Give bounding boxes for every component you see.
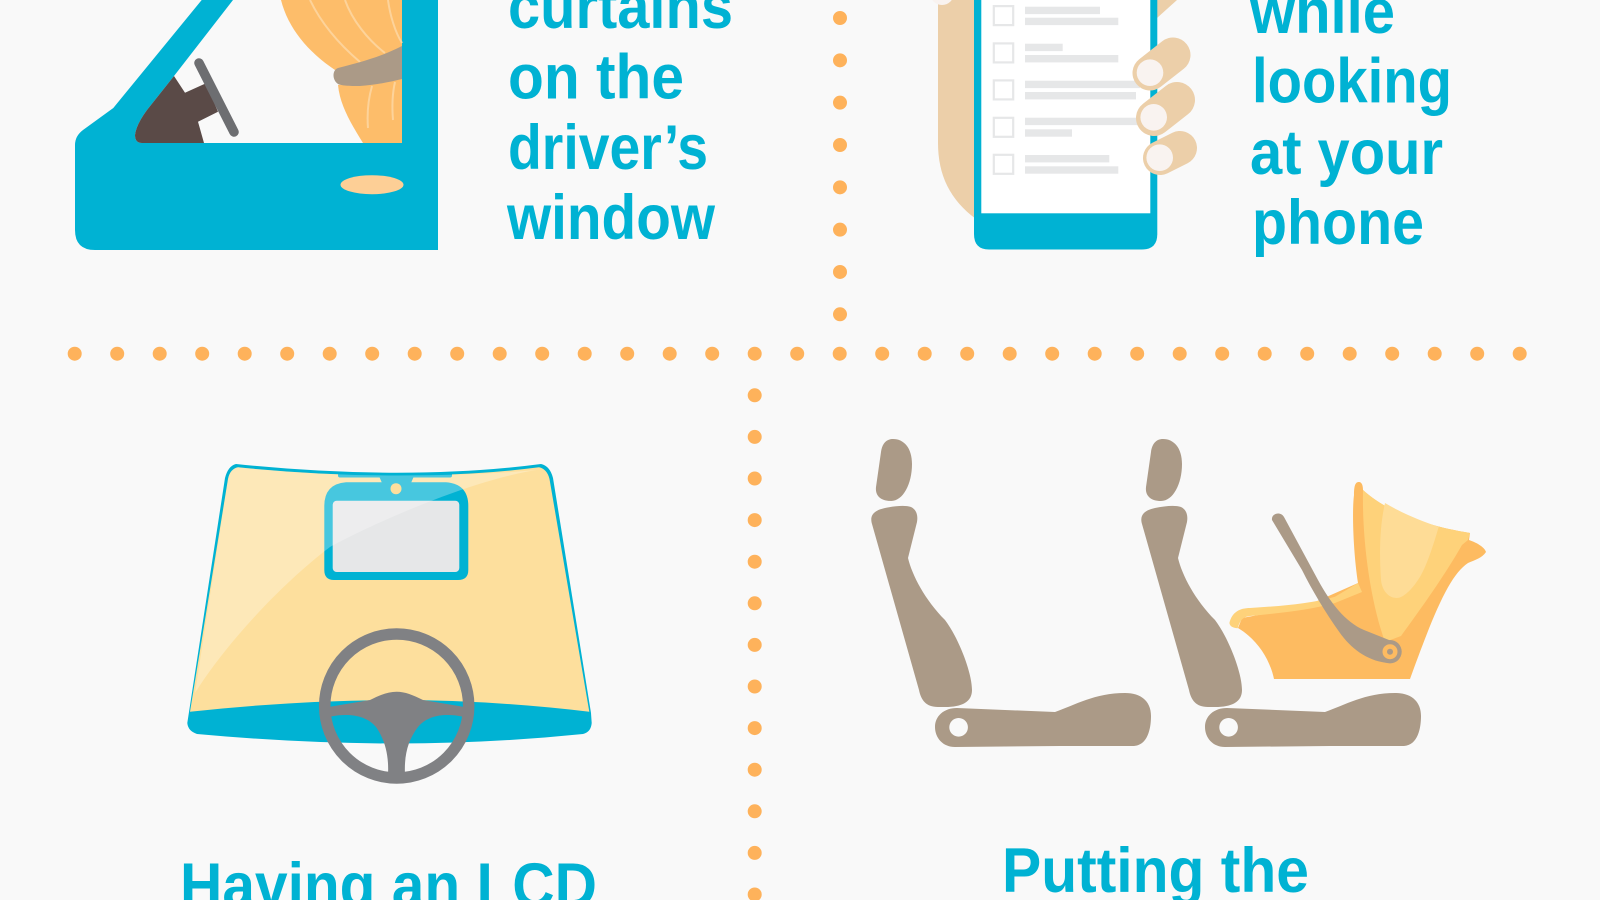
panel: putting the baby seat in the front xyxy=(871,439,1486,900)
steering wheel xyxy=(325,634,469,778)
panel: curtains on the driver's window xyxy=(75,0,733,253)
icon: car seat with baby carrier xyxy=(1141,439,1486,747)
panel: having an LCD on the windshield xyxy=(180,464,597,900)
baby carrier xyxy=(1229,482,1486,679)
icon: empty car seat xyxy=(871,439,1151,747)
LCD screen on mirror mount xyxy=(324,473,468,580)
text: while looking at your phone: phone xyxy=(1252,188,1424,258)
text: curtains on the driver's window xyxy=(506,0,733,253)
icon: windshield with LCD and steering wheel xyxy=(187,464,592,778)
car seat xyxy=(1141,439,1421,747)
text: while looking at your phone: looking xyxy=(1252,47,1452,117)
panel: walking while looking at your phone xyxy=(930,0,1452,258)
text: curtains on the driver's window: on the xyxy=(508,42,684,112)
glass highlight xyxy=(195,467,537,693)
windshield xyxy=(187,464,592,744)
text: while looking at your phone xyxy=(1249,0,1452,258)
text: curtains on the driver's window: driver’s xyxy=(508,113,708,183)
text: while looking at your phone: at your xyxy=(1250,118,1443,188)
icon: hand holding phone xyxy=(930,0,1180,250)
text: curtains on the driver's window: window xyxy=(506,183,716,253)
icon: car door with curtains xyxy=(75,0,438,250)
